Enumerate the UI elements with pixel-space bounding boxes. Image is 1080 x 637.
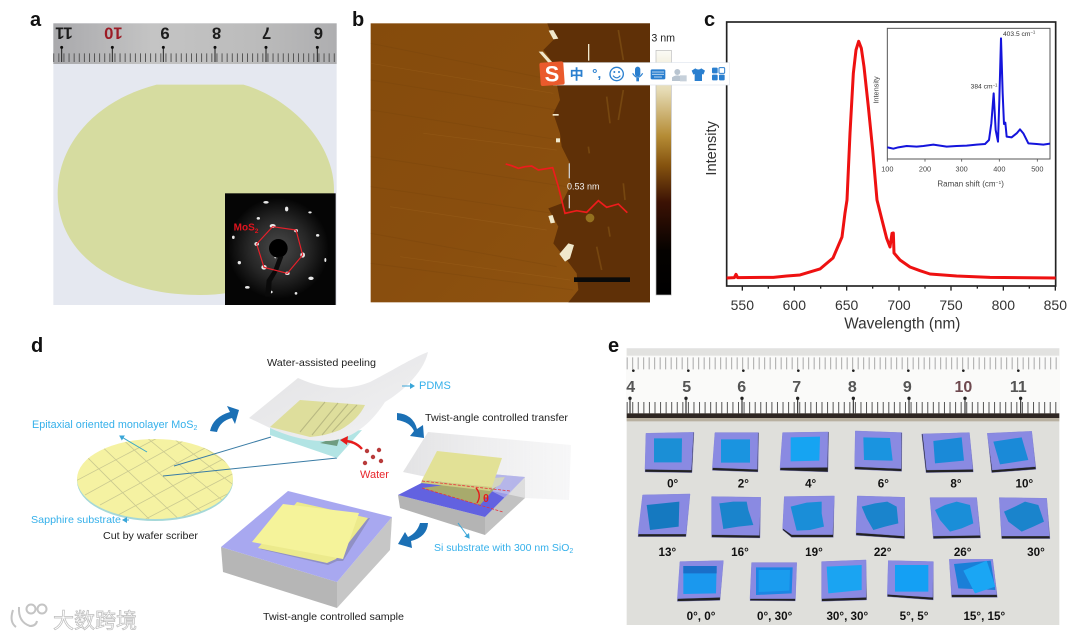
Raman inset: Intensity — [872, 76, 881, 104]
process arrow 2 — [397, 413, 424, 438]
icon: S logo: S — [545, 61, 559, 86]
x tick labels: 700 — [887, 297, 911, 313]
angle labels: 26° — [954, 546, 972, 559]
ruler: 4 — [626, 379, 635, 396]
angle labels: 15°, 15° — [963, 610, 1006, 623]
step labels: Cut by wafer scriber — [103, 530, 198, 542]
Raman inset: −1 — [992, 82, 998, 87]
ruler: 5 — [682, 379, 691, 396]
step labels: Sapphire substrate — [31, 514, 121, 526]
angle labels: 5°, 5° — [900, 610, 929, 623]
angle labels: 0° — [667, 477, 679, 490]
panel label b: b — [352, 9, 364, 31]
ruler: 6 — [314, 23, 323, 42]
process arrow 1 — [210, 406, 239, 432]
x tick labels: 650 — [835, 297, 859, 313]
bright particles — [539, 30, 589, 262]
x tick labels — [731, 297, 1067, 313]
toolbar icons — [570, 64, 725, 84]
diffraction inset: 2 — [255, 228, 259, 235]
ruler: 7 — [792, 379, 801, 396]
step labels: Si substrate with 300 nm SiO — [434, 542, 569, 554]
Raman inset: ) — [1001, 180, 1004, 189]
step labels: Twist-angle controlled transfer — [425, 412, 568, 424]
y axis title: Intensity — [704, 120, 720, 176]
angle labels: 0°, 0° — [687, 610, 716, 623]
panel a: wafer photograph — [53, 23, 337, 305]
lower step region — [543, 23, 650, 302]
panel label a: a — [30, 9, 42, 31]
icon: S logo — [539, 61, 565, 86]
x axis title: Wavelength (nm) — [844, 316, 960, 333]
Raman inset: 384 cm — [971, 84, 992, 91]
input-method toolbar overlay — [539, 61, 729, 86]
angle labels: 6° — [878, 477, 889, 490]
panel label d: d — [31, 335, 43, 357]
panel label e: e — [608, 335, 619, 357]
step labels: 2 — [193, 425, 197, 432]
ruler — [53, 23, 337, 64]
angle labels: 2° — [738, 477, 749, 490]
angle labels: 30°, 30° — [826, 610, 869, 623]
panel d: transfer process schematic — [31, 352, 573, 623]
step labels — [31, 357, 573, 623]
paper background — [627, 348, 1059, 625]
process arrow 3 — [398, 523, 428, 548]
ruler: 9 — [903, 379, 912, 396]
Raman inset: 500 — [1031, 164, 1043, 173]
ruler: 11 — [55, 23, 73, 42]
panel c: PL spectrum chart — [704, 22, 1067, 333]
angle labels: 13° — [659, 546, 676, 559]
step labels: Epitaxial oriented monolayer MoS — [32, 419, 193, 431]
x tick labels: 800 — [992, 297, 1015, 313]
panel e: sample photograph — [626, 348, 1059, 625]
panel b: AFM image — [371, 23, 675, 302]
step labels: Water-assisted peeling — [267, 357, 376, 369]
ruler: 7 — [262, 23, 271, 42]
angle labels — [659, 477, 1045, 623]
samples row 2 — [638, 494, 1050, 539]
axes frame — [727, 22, 1056, 286]
step labels: Twist-angle controlled sample — [263, 611, 404, 623]
Raman inset: 400 — [993, 164, 1005, 173]
Raman inset: 300 — [956, 164, 968, 173]
x tick labels: 550 — [731, 297, 754, 313]
photo background — [53, 23, 337, 305]
twist-angle sample — [221, 491, 392, 608]
diffraction inset: MoS — [234, 223, 255, 234]
x tick labels: 850 — [1044, 297, 1067, 313]
Raman inset: 100 — [881, 164, 893, 173]
peeling block — [249, 352, 428, 465]
angle labels: 10° — [1016, 477, 1033, 490]
step labels: Water — [360, 469, 389, 481]
Raman inset — [872, 28, 1050, 189]
colour bar — [651, 33, 675, 295]
watermark: 大数跨境 — [53, 605, 137, 635]
angle labels: 0°, 30° — [757, 610, 793, 623]
PDMS arrow — [402, 385, 414, 387]
samples row 1 — [645, 431, 1036, 473]
step height label — [567, 163, 599, 208]
transfer stage — [398, 432, 571, 538]
panel label c: c — [704, 9, 715, 31]
Raman inset: −1 — [996, 180, 1001, 186]
diffraction inset — [225, 193, 336, 305]
toolbar icons: °, — [592, 66, 601, 81]
ruler: 6 — [737, 379, 746, 396]
axis ticks — [742, 286, 1055, 291]
angle labels: 22° — [874, 546, 892, 559]
ruler: 8 — [848, 379, 857, 396]
theta label: θ — [483, 493, 489, 505]
ruler: 10 — [104, 23, 123, 42]
step labels: 2 — [569, 548, 573, 555]
angle labels: 16° — [731, 546, 749, 559]
angle labels: 30° — [1027, 546, 1045, 559]
step labels: PDMS — [419, 380, 451, 392]
Raman inset: 403.5 cm — [1003, 31, 1030, 38]
x tick labels: 750 — [939, 297, 963, 313]
water droplets — [363, 448, 383, 465]
zoom lines — [163, 437, 337, 476]
Raman inset: 200 — [919, 164, 931, 173]
step height label: 0.53 nm — [567, 181, 599, 191]
angle labels: 8° — [950, 477, 962, 490]
angle labels: 4° — [805, 477, 817, 490]
x tick labels: 600 — [783, 297, 806, 313]
scale bar — [574, 277, 630, 282]
wafer — [77, 436, 233, 523]
Raman inset: Raman shift (cm — [937, 180, 996, 189]
ruler: 11 — [1010, 379, 1027, 396]
colour bar: 3 nm — [651, 33, 675, 45]
Raman inset: −1 — [1030, 30, 1036, 35]
watermark — [12, 604, 137, 635]
ruler: 10 — [954, 379, 972, 396]
samples row 3 — [677, 559, 997, 601]
angle labels: 19° — [805, 546, 823, 559]
ruler: 8 — [212, 23, 221, 42]
MoS2 wafer — [58, 85, 334, 295]
ruler — [626, 348, 1059, 421]
red arrow — [344, 441, 362, 449]
ruler: 9 — [160, 23, 170, 42]
toolbar icons: 中 — [570, 64, 584, 84]
height profile — [506, 164, 627, 213]
red PL curve — [727, 41, 1056, 278]
AFM terrace — [371, 23, 650, 302]
